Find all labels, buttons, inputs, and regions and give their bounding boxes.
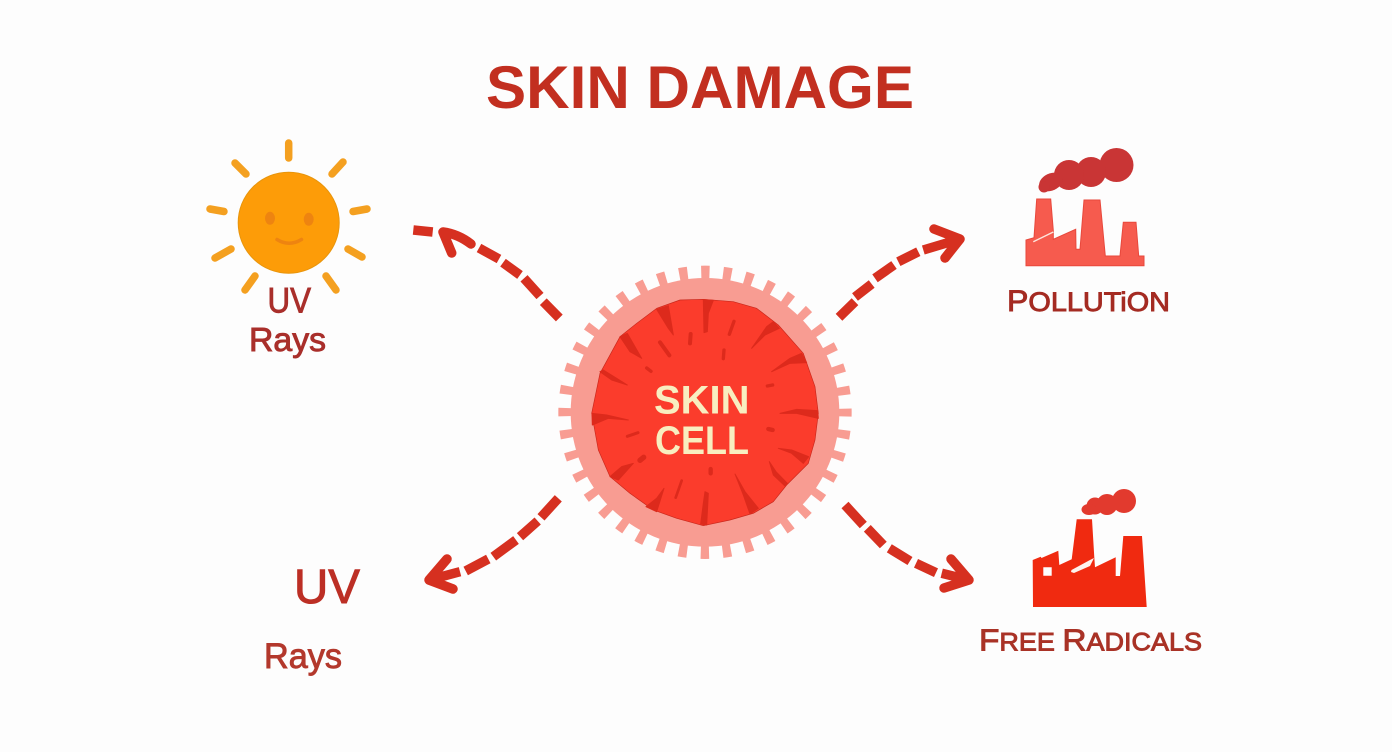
arrow: cell to free radicals <box>845 505 969 588</box>
cell membrane with teeth <box>566 273 844 552</box>
label: Skin Cell: CELL <box>655 419 749 463</box>
icon: free radicals factory <box>1033 489 1147 607</box>
skin cell <box>566 273 844 552</box>
label: UV Rays (top left): Rays <box>249 321 326 358</box>
label: Skin Cell: SKIN <box>654 378 750 422</box>
label: Free Radicals: FREE RADICALS <box>979 622 1202 658</box>
arrow: cell to UV rays top left <box>413 230 559 318</box>
label: UV Rays (top left): UV <box>268 282 312 320</box>
title: SKIN DAMAGE <box>486 54 914 121</box>
label: Rays (bottom left): Rays <box>264 637 342 676</box>
label: UV Rays (top left) <box>249 282 326 358</box>
arrow: cell to pollution <box>839 229 960 317</box>
label: Pollution: POLLUTiON <box>1007 285 1170 318</box>
label: Skin Cell <box>654 378 750 463</box>
arrow: cell to UV rays bottom left <box>429 498 558 589</box>
icon: sun with face <box>210 143 367 290</box>
cell interior with veins <box>592 299 818 526</box>
icon: pollution factory <box>1026 148 1144 266</box>
label: UV (bottom left): UV <box>294 561 360 614</box>
